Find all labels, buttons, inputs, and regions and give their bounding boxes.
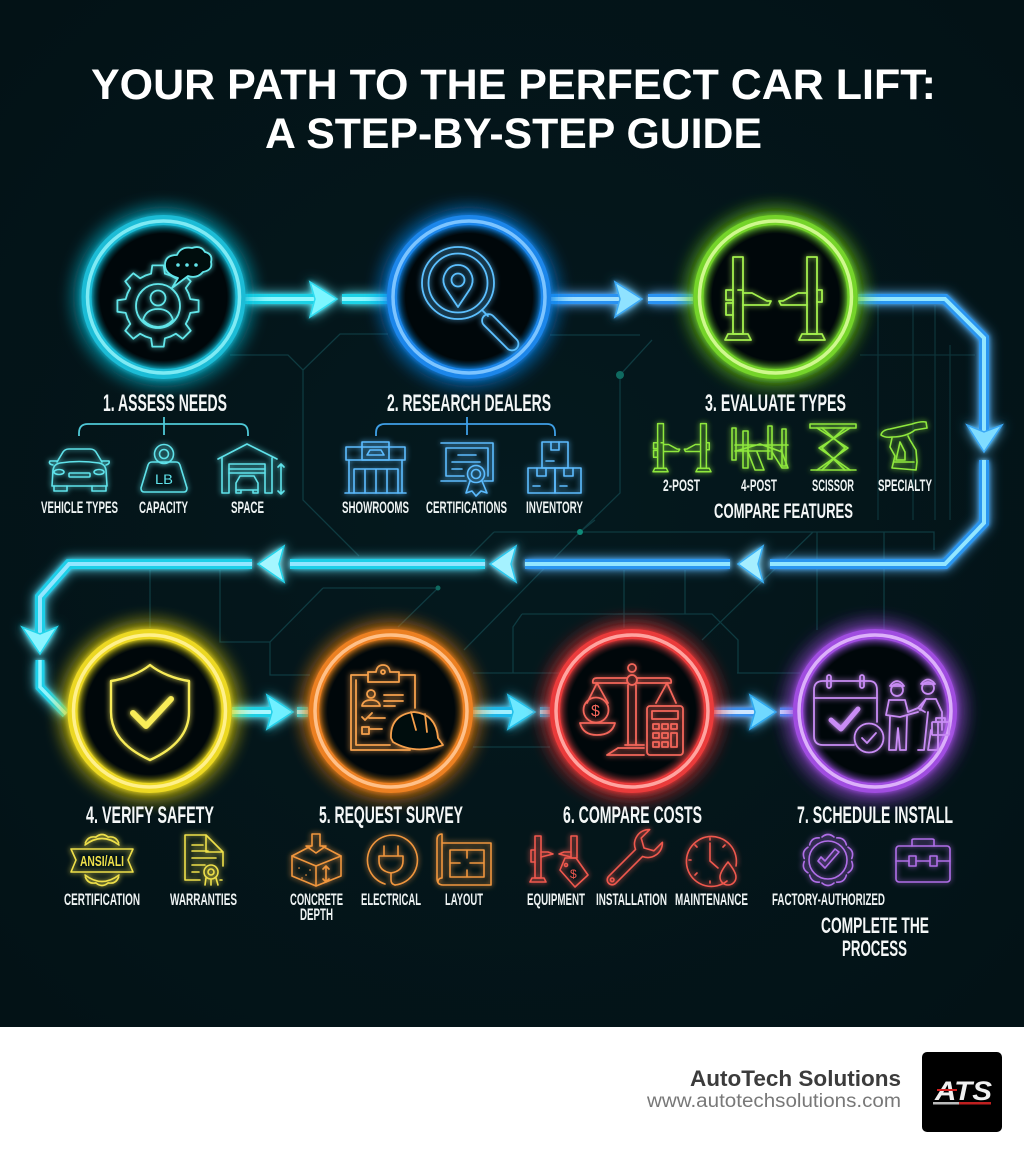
icon: calendar, check and handshake workers [814, 675, 949, 752]
label: INVENTORY [526, 499, 583, 517]
icon: certificate [441, 443, 493, 496]
label: MAINTENANCE [675, 891, 748, 909]
icon: weight [141, 444, 187, 492]
icon: garage [218, 444, 284, 494]
icon: scissor lift [810, 424, 856, 470]
footer band [0, 1027, 1024, 1154]
label: 2-POST [663, 477, 700, 495]
bracket connector [79, 417, 248, 436]
panel: step 3 evaluate types [653, 220, 932, 523]
icon: toolbox [896, 839, 950, 882]
label: SPACE [231, 499, 264, 517]
label: SCISSOR [812, 477, 854, 495]
icon: ANSI/ALI badge [71, 834, 133, 886]
coin dollar sign: $ [591, 703, 600, 720]
title [91, 61, 936, 158]
subheading: COMPARE FEATURES [714, 499, 853, 523]
circuit board lines background [150, 305, 975, 747]
icon: four-post lift [732, 426, 788, 470]
ring 7 [798, 634, 952, 788]
badge text: ANSI/ALI [80, 853, 124, 870]
icon: warranty document [185, 835, 223, 885]
icon: magnifier with location pin [422, 247, 521, 353]
panel: step 6 compare costs [527, 634, 748, 909]
ring 1 [86, 220, 240, 374]
closing text: COMPLETE THE [821, 913, 929, 938]
panel: step 4 verify safety [64, 634, 237, 909]
bracket connector [376, 417, 555, 436]
label: ELECTRICAL [361, 891, 421, 909]
icon: authorized badge [802, 834, 854, 886]
icon: blueprint layout [437, 834, 491, 885]
heading: 6. COMPARE COSTS [563, 802, 702, 829]
panel: step 1 assess needs [41, 220, 284, 517]
icon: concrete block [292, 834, 341, 886]
icon: car [49, 449, 109, 491]
icon: shield with check [111, 665, 189, 760]
label: EQUIPMENT [527, 891, 585, 909]
ring 5 [314, 634, 468, 788]
heading: 1. ASSESS NEEDS [103, 390, 227, 417]
heading: 3. EVALUATE TYPES [705, 390, 846, 417]
closing text [821, 913, 929, 961]
weight unit: LB [155, 471, 173, 487]
label: 4-POST [741, 477, 777, 495]
logo: ATS [934, 1076, 992, 1106]
ring 2 [392, 220, 546, 374]
label: CONCRETE [290, 891, 343, 909]
tag dollar sign: $ [570, 867, 577, 881]
label: INSTALLATION [596, 891, 667, 909]
label: FACTORY-AUTHORIZED [772, 891, 885, 909]
icon: stacked boxes [528, 442, 581, 493]
label: CERTIFICATION [64, 891, 140, 909]
heading: 5. REQUEST SURVEY [319, 802, 463, 829]
icon: clock with droplet [686, 836, 736, 886]
panel: step 7 schedule install [772, 634, 953, 961]
ring 3 [698, 220, 852, 374]
label: LAYOUT [445, 891, 483, 909]
heading: 2. RESEARCH DEALERS [387, 390, 551, 417]
icon: two-post lift [725, 257, 825, 340]
company name: AutoTech Solutions [690, 1066, 901, 1091]
ring 6 [555, 634, 709, 788]
icon: small two-post lift [653, 424, 711, 472]
heading: 4. VERIFY SAFETY [86, 802, 214, 829]
panel: step 5 request survey [290, 634, 491, 924]
label: VEHICLE TYPES [41, 499, 118, 517]
title: YOUR PATH TO THE PERFECT CAR LIFT: [91, 61, 936, 109]
logo [922, 1052, 1002, 1132]
icon: showroom [345, 442, 406, 493]
flow arrows connecting steps [22, 282, 1002, 729]
icon: equipment lift with price tag [530, 836, 588, 887]
icon: specialty lift [881, 422, 927, 470]
icon: wrench [599, 826, 666, 893]
label: WARRANTIES [170, 891, 237, 909]
icon: balance scale with calculator [580, 664, 683, 755]
label: DEPTH [300, 906, 333, 924]
ring 4 [72, 634, 226, 788]
label: CERTIFICATIONS [426, 499, 507, 517]
icon: gear with person and speech bubble [117, 247, 211, 347]
label: SPECIALTY [878, 477, 932, 495]
title: A STEP-BY-STEP GUIDE [265, 110, 762, 158]
icon: electrical plug [367, 835, 417, 885]
icon: clipboard with hard hat [351, 665, 443, 750]
panel: step 2 research dealers [342, 220, 583, 517]
label: SHOWROOMS [342, 499, 409, 517]
closing text: PROCESS [842, 936, 907, 961]
label: CAPACITY [139, 499, 188, 517]
website: www.autotechsolutions.com [646, 1091, 901, 1112]
label [290, 891, 343, 924]
